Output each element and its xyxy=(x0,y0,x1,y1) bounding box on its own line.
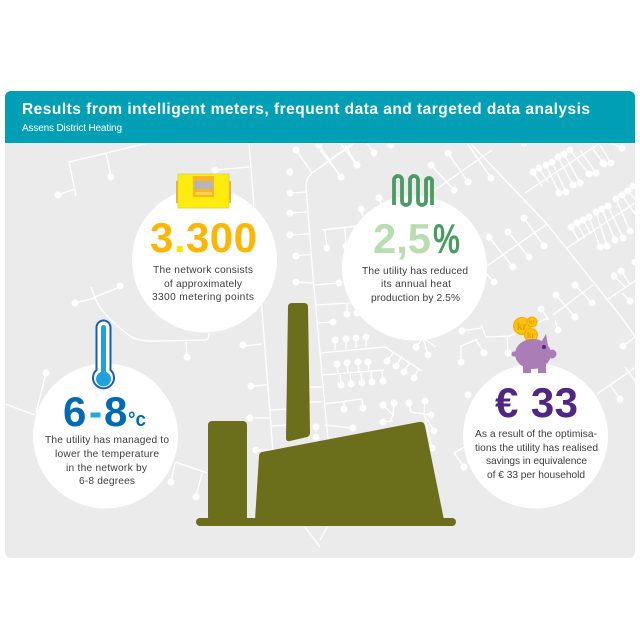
network map xyxy=(5,140,638,547)
description: The utility has managed to xyxy=(45,435,169,446)
value xyxy=(373,215,460,262)
value: 2,5 xyxy=(373,215,431,262)
factory xyxy=(196,303,456,526)
description: 3300 metering points xyxy=(152,292,254,303)
icon: heat meter xyxy=(176,174,231,208)
icon: piggy bank with coins: kr xyxy=(517,322,527,333)
header band xyxy=(5,91,635,143)
value: % xyxy=(433,215,460,262)
description: its annual heat xyxy=(381,279,451,290)
stat: metering points xyxy=(132,174,277,332)
description: of approximately xyxy=(164,279,243,290)
title: Results from intelligent meters, frequent data and targeted data analysis xyxy=(22,101,590,118)
description: tions the utility has realised xyxy=(475,443,598,454)
icon: piggy bank with coins: kr xyxy=(527,331,535,340)
subtitle: Assens District Heating xyxy=(22,123,122,134)
value: 8 xyxy=(104,388,127,435)
icon: piggy bank with coins xyxy=(512,317,556,373)
stat: heat production xyxy=(342,176,487,340)
description: The utility has reduced xyxy=(362,266,468,277)
stat: temperature xyxy=(33,321,178,508)
description: production by 2.5% xyxy=(371,293,460,304)
description xyxy=(362,266,468,304)
value xyxy=(63,388,146,435)
value: € 33 xyxy=(495,379,578,426)
icon: thermometer xyxy=(93,321,114,388)
description: lower the temperature xyxy=(55,449,159,460)
description: As a result of the optimisa- xyxy=(475,429,597,440)
description: 6-8 degrees xyxy=(79,476,135,487)
description: savings in equivalence xyxy=(486,456,587,467)
description: of € 33 per household xyxy=(487,470,585,481)
description xyxy=(45,435,169,487)
description xyxy=(152,265,254,303)
icon: heating coil xyxy=(394,176,432,205)
description xyxy=(475,429,598,481)
stat: savings xyxy=(463,317,608,508)
icon: piggy bank with coins: kr xyxy=(529,320,535,326)
description: The network consists xyxy=(153,265,253,276)
description: in the network by xyxy=(66,463,148,474)
value: 6 xyxy=(63,388,86,435)
panel: background xyxy=(5,91,635,558)
value: °c xyxy=(128,409,146,431)
value: 3.300 xyxy=(150,214,257,261)
value: - xyxy=(89,388,102,435)
